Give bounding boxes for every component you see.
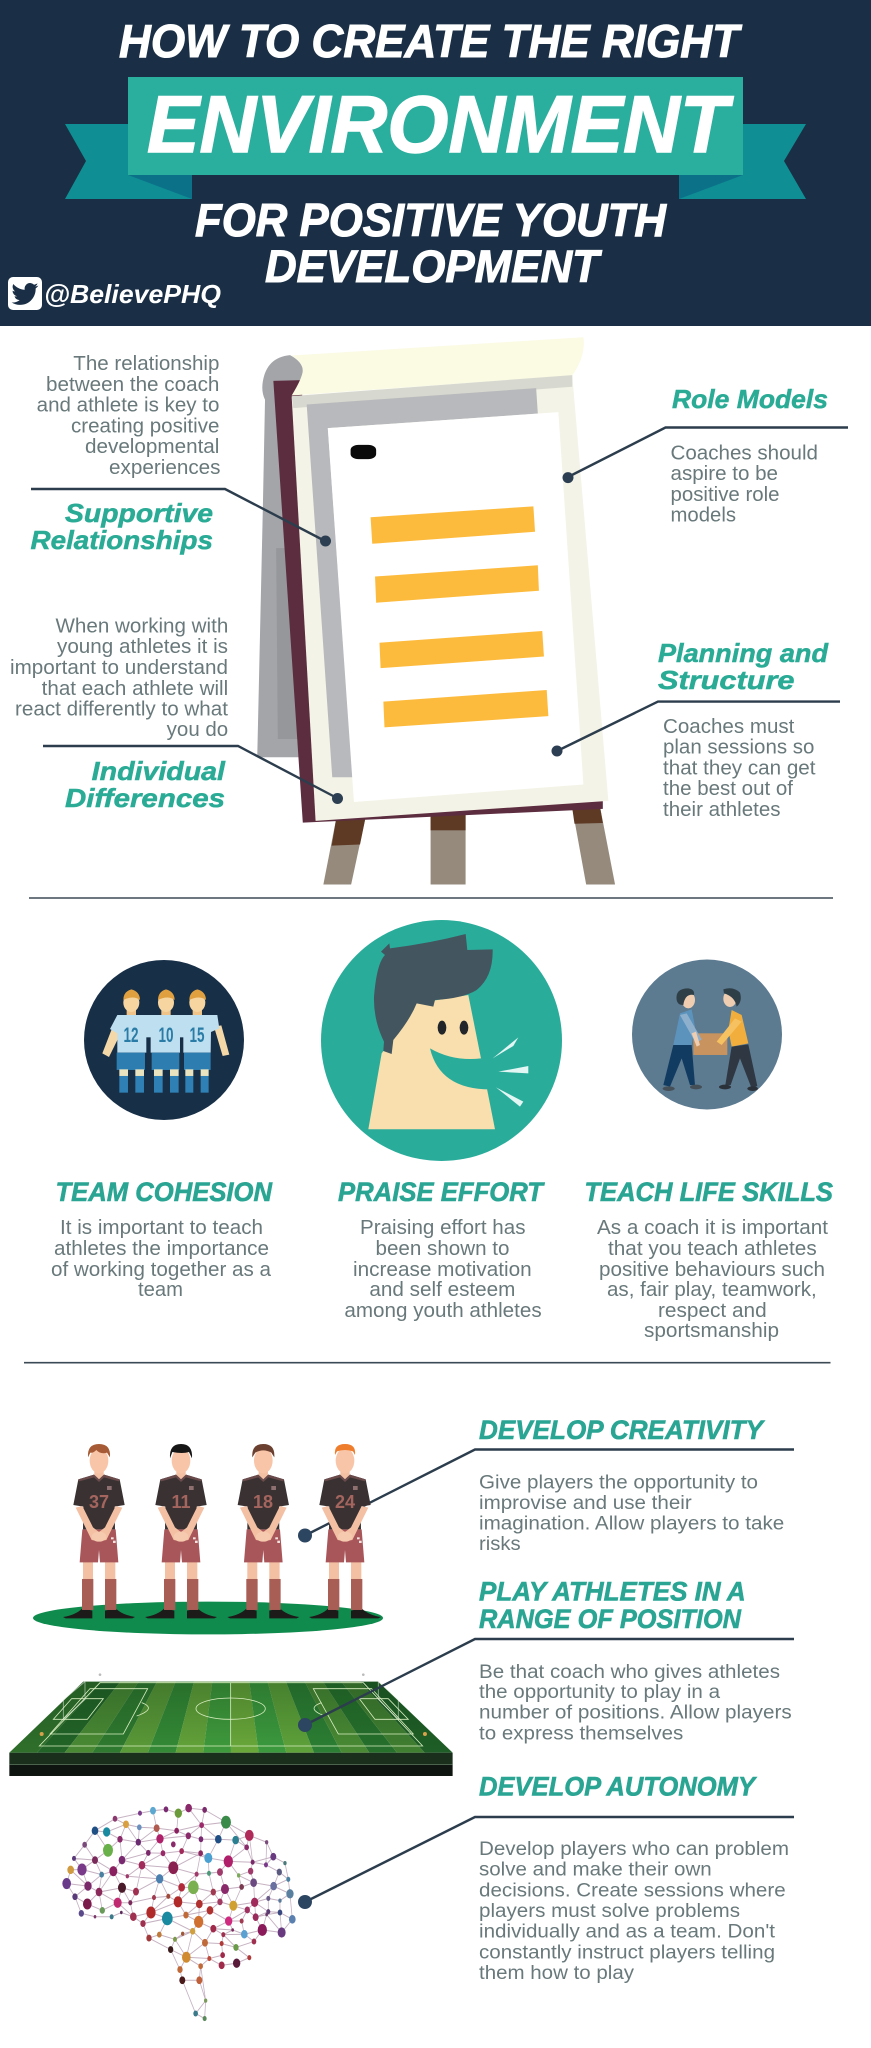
flipchart roll [292, 337, 584, 395]
ribbon right tail [679, 124, 806, 199]
panel: team cohesion [51, 960, 272, 1301]
text: teach life skills body: respect and [658, 1300, 767, 1322]
text: teach life skills body [597, 1217, 828, 1342]
pitch stripes [9, 1682, 453, 1753]
callout: individual differences: react differently to what [15, 698, 228, 720]
icon: three players circle: 15 [190, 1024, 205, 1047]
callout: individual differences: When working with [56, 616, 228, 638]
text: team cohesion body: of working together as a [51, 1259, 272, 1281]
callout: planning and structure: Coaches must [663, 716, 795, 738]
icon: three players circle [84, 960, 244, 1120]
callout: planning and structure: Structure [658, 665, 794, 695]
flipchart illustration [257, 337, 615, 884]
icon: twitter [8, 277, 42, 310]
block: develop autonomy: Develop players who can problem [479, 1839, 789, 1860]
block: develop creativity: risks [479, 1534, 521, 1555]
illustration: four players on grass: 18 [253, 1492, 273, 1512]
block: play athletes in a range of position: RANGE OF POSITION [479, 1604, 741, 1634]
callout: individual differences: Individual [92, 756, 226, 786]
callout: individual differences [10, 616, 343, 813]
ribbon left fold [128, 175, 192, 199]
title word environment: ENVIRONMENT [147, 80, 734, 170]
brain connections [67, 1808, 292, 2019]
callout: planning and structure: their athletes [663, 799, 780, 821]
text: teach life skills body: as, fair play, teamwork, [607, 1279, 817, 1301]
callout: role models: aspire to be [670, 463, 778, 485]
ribbon main panel [128, 77, 743, 175]
callout: individual differences: you do [167, 719, 228, 741]
callout: supportive relationships: developmental [85, 436, 219, 458]
illustration: football pitch [9, 1673, 453, 1776]
callout: supportive relationships [30, 353, 331, 555]
callout: planning and structure: Planning and [658, 638, 829, 668]
connector: develop creativity [298, 1450, 794, 1542]
block: play athletes in a range of position: to express themselves [479, 1724, 683, 1744]
block: develop autonomy: constantly instruct players telling [479, 1943, 775, 1964]
callout: planning and structure: plan sessions so [663, 737, 814, 759]
panel: teach life skills [584, 960, 833, 1342]
icon: three players circle: 10 [158, 1024, 174, 1047]
text: teach life skills body: positive behaviours such [599, 1259, 825, 1281]
illustration: four players on grass: 37 [89, 1492, 109, 1512]
illustration: four players on grass [33, 1444, 383, 1634]
text: team cohesion body: team [138, 1279, 183, 1301]
heading: team cohesion: TEAM COHESION [56, 1177, 272, 1207]
callout: role models: positive role [670, 484, 780, 506]
pitch markings [39, 1682, 423, 1746]
block: develop autonomy: DEVELOP AUTONOMY [479, 1771, 758, 1801]
callout: individual differences: young athletes it is [57, 636, 228, 658]
orange bars [371, 506, 548, 727]
block: develop creativity: imagination. Allow players to take [479, 1514, 784, 1535]
text: praise effort body [344, 1217, 542, 1322]
icon: three players circle: 12 [124, 1024, 138, 1047]
connector: play athletes [298, 1639, 794, 1732]
ribbon right fold [679, 175, 743, 199]
grass ellipse [33, 1602, 383, 1634]
block: develop creativity [479, 1415, 784, 1555]
block: develop creativity: improvise and use their [479, 1493, 692, 1514]
text: praise effort body: and self esteem [369, 1279, 515, 1301]
callout: supportive relationships: experiences [109, 457, 220, 479]
illustration: four players on grass: 11 [171, 1492, 191, 1512]
icon: two people carrying box circle [632, 960, 782, 1110]
pitch flags [40, 1673, 427, 1736]
flipchart spine [273, 380, 603, 823]
text: teach life skills body: that you teach athletes [608, 1238, 817, 1260]
text: praise effort body: Praising effort has [360, 1217, 526, 1239]
callout: individual differences: that each athlete will [42, 678, 228, 700]
illustration: four players on grass: 24 [335, 1492, 355, 1512]
callout: individual differences: important to understand [10, 657, 228, 679]
callout: role models: Role Models [672, 384, 828, 414]
callout: planning and structure: that they can get [663, 757, 816, 779]
twitter handle: @BelievePHQ [44, 279, 221, 309]
callout: supportive relationships: between the coach [46, 374, 219, 396]
block: develop autonomy: them how to play [479, 1963, 635, 1984]
callout: supportive relationships: Relationships [30, 525, 213, 555]
text: praise effort body: increase motivation [353, 1259, 532, 1281]
header banner [0, 0, 871, 326]
text: team cohesion body: athletes the importance [54, 1238, 269, 1260]
callout: planning and structure: the best out of [663, 778, 793, 800]
text: praise effort body: among youth athletes [344, 1300, 542, 1322]
ribbon left tail [65, 124, 192, 199]
block: develop autonomy: individually and as a team. Don't [479, 1922, 776, 1943]
icon: speaking face circle [321, 920, 562, 1161]
block: develop creativity: DEVELOP CREATIVITY [479, 1415, 766, 1445]
connector: develop autonomy [298, 1817, 794, 1909]
callout: supportive relationships: and athlete is key to [37, 394, 219, 416]
illustration: network brain [62, 1804, 296, 2021]
brain nodes [62, 1804, 296, 2021]
callout: individual differences: Differences [65, 783, 225, 813]
block: develop autonomy [479, 1771, 789, 1984]
title line 1: HOW TO CREATE THE RIGHT [119, 15, 743, 67]
pitch side wall [9, 1753, 453, 1776]
marker tab [351, 445, 376, 459]
callout: role models [562, 384, 848, 527]
block: develop autonomy: players must solve problems [479, 1901, 740, 1922]
callout: supportive relationships: creating positive [71, 416, 219, 438]
block: develop autonomy: decisions. Create sessions where [479, 1880, 786, 1901]
text: team cohesion body: It is important to teach [60, 1217, 263, 1239]
text: team cohesion body [51, 1217, 272, 1301]
callout: role models: Coaches should [670, 442, 818, 464]
block: play athletes in a range of position: Be that coach who gives athletes [479, 1662, 780, 1683]
title line 3: FOR POSITIVE YOUTH [195, 194, 667, 246]
flipchart white sheet [328, 412, 583, 802]
text: praise effort body: been shown to [376, 1238, 510, 1260]
flipchart grey sheet [307, 388, 538, 777]
heading: praise effort: PRAISE EFFORT [338, 1177, 545, 1207]
block: play athletes in a range of position [479, 1577, 792, 1744]
heading: teach life skills: TEACH LIFE SKILLS [584, 1177, 833, 1207]
callout: supportive relationships: The relationship [73, 353, 219, 375]
block: play athletes in a range of position: the opportunity to play in a [479, 1682, 720, 1703]
callout: role models: models [670, 505, 736, 527]
text: teach life skills body: As a coach it is important [597, 1217, 828, 1239]
callout: planning and structure [552, 638, 840, 821]
block: develop creativity: Give players the opportunity to [479, 1473, 758, 1494]
title line 4: DEVELOPMENT [265, 241, 602, 292]
flipchart cream paper [292, 375, 608, 821]
block: develop autonomy: solve and make their own [479, 1860, 712, 1880]
flipchart legs [323, 807, 615, 884]
flipchart back board [257, 355, 303, 757]
block: play athletes in a range of position: number of positions. Allow players [479, 1703, 792, 1724]
callout: supportive relationships: Supportive [65, 498, 213, 528]
text: teach life skills body: sportsmanship [644, 1320, 779, 1342]
block: play athletes in a range of position: PLAY ATHLETES IN A [479, 1577, 746, 1607]
panel: praise effort [321, 920, 562, 1322]
